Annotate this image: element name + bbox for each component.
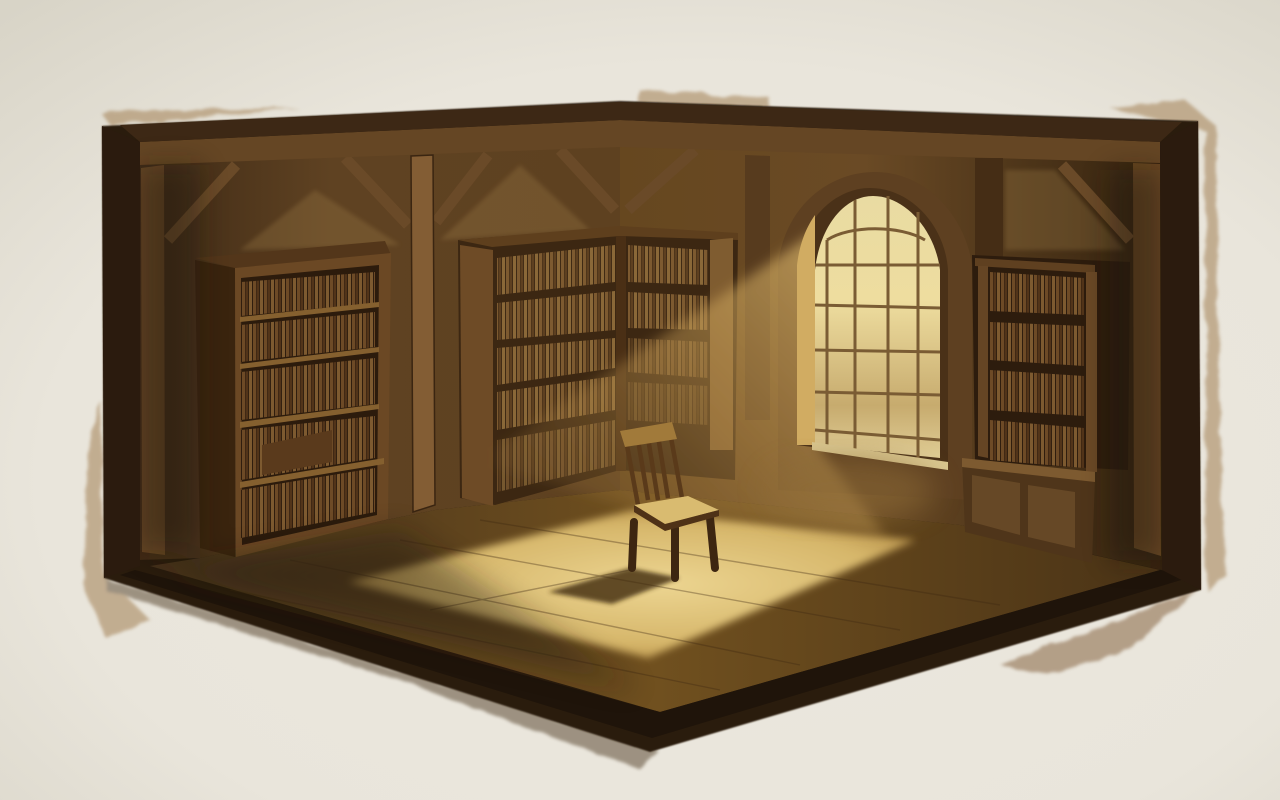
ceiling beam [120,102,1182,165]
room outer shell [102,101,1201,752]
light beam [497,232,885,535]
sunlit floor patch [348,510,916,658]
wooden posts [141,155,1161,556]
dust haze below window [765,458,935,522]
chair [620,422,719,578]
outer frame sides [102,121,1201,590]
wall bracing timbers [168,150,1130,240]
corner shading [140,165,1160,690]
floor front edge [120,570,1198,738]
bookshelf: left [195,241,391,557]
wall hatched panels [240,165,1125,250]
arched window [797,188,948,470]
bookshelf: middle corner [458,226,738,506]
right back wall [620,145,1162,570]
floor planks [230,520,1000,690]
watercolor edge stains [84,90,1226,770]
window arch surround [778,172,972,500]
chair shadow [548,568,680,604]
floor [150,490,1160,712]
left back wall [138,145,620,560]
bookshelf: right with cabinet [962,255,1130,563]
